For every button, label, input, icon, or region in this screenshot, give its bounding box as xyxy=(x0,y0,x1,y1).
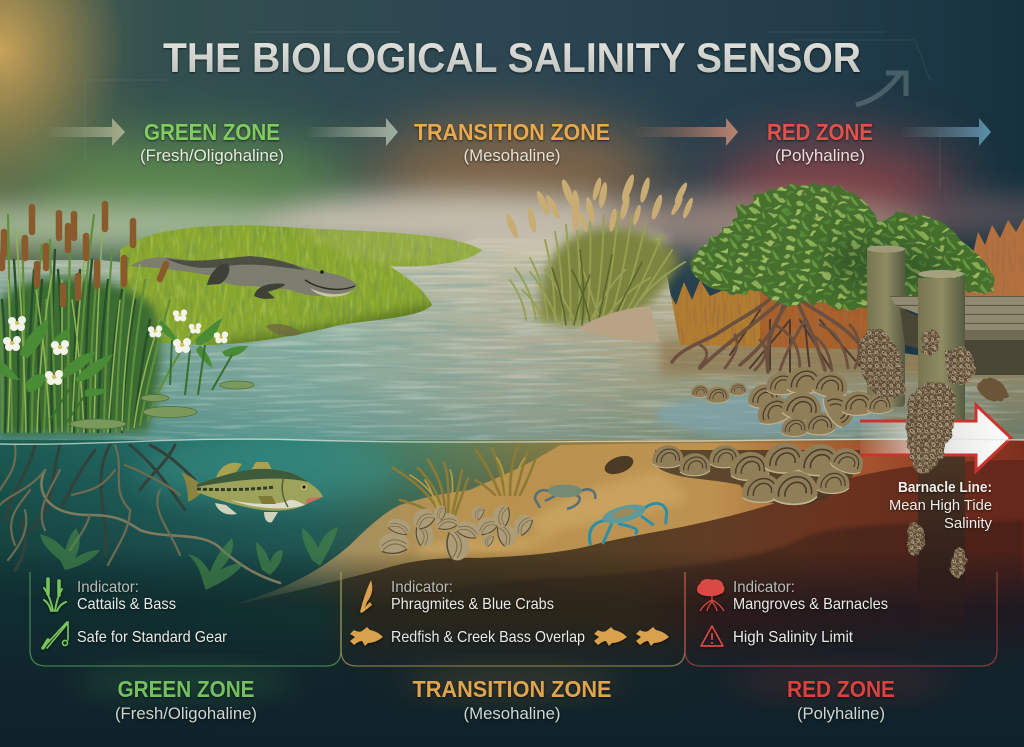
icon: warning triangle xyxy=(701,626,723,646)
transition zone text xyxy=(391,579,585,646)
oysters below waterline xyxy=(652,443,867,506)
glow under panels xyxy=(76,668,951,696)
oysters above waterline xyxy=(691,367,893,437)
red zone text: Indicator: xyxy=(733,579,795,596)
panel: green zone xyxy=(30,572,341,666)
clams xyxy=(378,503,537,561)
green zone text: Cattails & Bass xyxy=(77,596,176,613)
alligator xyxy=(130,256,357,299)
bottom dark panel background xyxy=(0,553,1024,664)
underwater plants xyxy=(40,527,338,590)
icon: redfish xyxy=(350,627,383,646)
green zone text: Safe for Standard Gear xyxy=(77,629,228,646)
bottom label: transition zone: TRANSITION ZONE xyxy=(412,676,612,702)
top label: red zone: (Polyhaline) xyxy=(775,146,865,165)
top label: red zone: RED ZONE xyxy=(767,119,873,145)
top flow arrows xyxy=(45,118,991,146)
panel: red zone xyxy=(685,572,997,666)
icon: bass and redfish pair xyxy=(594,627,669,646)
indicator panels xyxy=(30,572,997,666)
green zone text: Indicator: xyxy=(77,579,139,596)
barnacle line callout xyxy=(889,479,992,532)
bottom label: red zone: (Polyhaline) xyxy=(797,704,885,723)
green zone panel content xyxy=(43,579,228,648)
icon: fishing rod xyxy=(43,622,68,648)
transition zone text: Indicator: xyxy=(391,579,453,596)
red zone text xyxy=(733,579,888,646)
red zone panel content xyxy=(697,579,888,646)
top label: green zone: GREEN ZONE xyxy=(144,119,280,145)
decorative HUD lines xyxy=(85,32,940,190)
icon: phragmites xyxy=(360,580,372,613)
red zone text: Mangroves & Barnacles xyxy=(733,596,888,613)
barnacle clusters xyxy=(859,329,1008,577)
bottom label: transition zone xyxy=(412,676,612,723)
largemouth bass xyxy=(181,462,323,523)
green zone text xyxy=(77,579,228,646)
mist band xyxy=(0,192,1024,255)
barnacle line callout: Salinity xyxy=(944,515,992,532)
far green marsh bank xyxy=(120,222,490,350)
bottom label: green zone: GREEN ZONE xyxy=(118,676,254,702)
dock and posts xyxy=(867,246,1024,635)
barnacle line callout: Barnacle Line: xyxy=(898,479,992,496)
water surface xyxy=(0,228,1024,445)
top label: green zone xyxy=(140,119,284,165)
arrowhead flowers and leaves xyxy=(0,309,248,425)
bottom label: red zone: RED ZONE xyxy=(787,676,895,702)
icon: cattails xyxy=(44,579,66,611)
seagrass tufts on sand xyxy=(393,445,535,515)
sand bank xyxy=(578,306,660,342)
transition zone text: Phragmites & Blue Crabs xyxy=(391,596,554,613)
mangrove tree xyxy=(672,183,993,372)
transition zone panel content xyxy=(350,579,669,646)
sand seabed xyxy=(200,442,1024,650)
bottom label: green zone xyxy=(115,676,257,723)
red zone text: High Salinity Limit xyxy=(733,629,854,646)
icon: mangrove xyxy=(697,579,724,611)
waterline xyxy=(0,439,1024,444)
lily pads xyxy=(70,381,254,429)
panel: transition zone xyxy=(341,572,685,666)
title: THE BIOLOGICAL SALINITY SENSOR xyxy=(163,34,861,81)
cattails cluster xyxy=(0,204,195,435)
bottom label: transition zone: (Mesohaline) xyxy=(464,704,560,723)
top label: transition zone xyxy=(414,119,610,165)
red arrow with white fill: barnacle line xyxy=(860,405,1011,471)
background sky xyxy=(0,0,1024,400)
bottom label: red zone xyxy=(787,676,895,723)
bottom label: green zone: (Fresh/Oligohaline) xyxy=(115,704,257,723)
underwater roots xyxy=(0,445,280,583)
background orange marsh grass xyxy=(670,218,1024,350)
top label: transition zone: (Mesohaline) xyxy=(464,146,560,165)
top label: transition zone: TRANSITION ZONE xyxy=(414,119,610,145)
phragmites reeds xyxy=(504,173,695,325)
blue crabs xyxy=(535,452,671,547)
top label: green zone: (Fresh/Oligohaline) xyxy=(140,146,284,165)
top label: red zone xyxy=(767,119,873,165)
transition zone text: Redfish & Creek Bass Overlap xyxy=(391,629,585,646)
underwater zone xyxy=(0,435,1024,630)
barnacle line callout: Mean High Tide xyxy=(889,497,992,514)
